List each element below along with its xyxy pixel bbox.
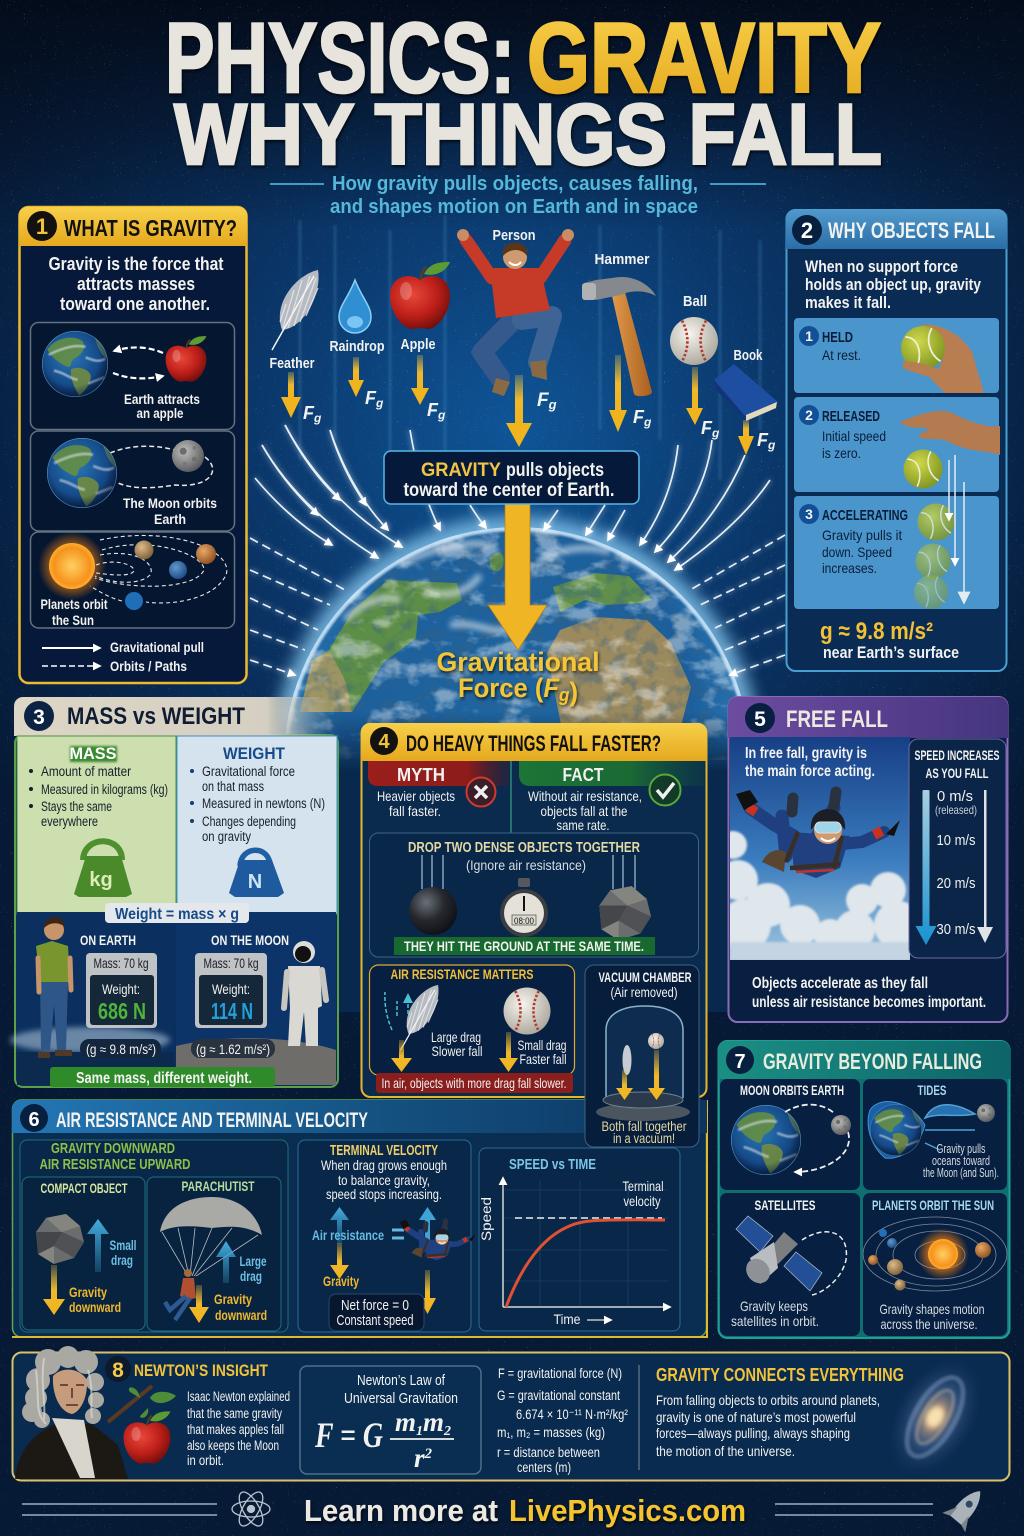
sky scene: [730, 737, 910, 960]
air resistance matters: [370, 965, 574, 1075]
card: tides: [863, 1079, 1007, 1190]
object: jumping person: g: [548, 397, 557, 412]
panel 7: gravity beyond falling: [718, 1041, 1010, 1338]
number badge 2: 2: [801, 218, 813, 243]
footer link text: Learn more at: [304, 1493, 498, 1528]
drop experiment: DROP TWO DENSE OBJECTS TOGETHER: [408, 840, 640, 856]
gravity connects everything: gravity is one of nature’s most powerful: [656, 1409, 856, 1425]
speed vs time chart: velocity: [624, 1193, 660, 1209]
object: raindrop: Raindrop: [330, 338, 384, 355]
definition text: attracts masses: [77, 274, 195, 294]
panel 8: newton's insight: [12, 1342, 1010, 1492]
object: apple: Apple: [400, 336, 436, 353]
same time banner: THEY HIT THE GROUND AT THE SAME TIME.: [404, 938, 644, 954]
step 3: accelerating: down. Speed: [822, 544, 892, 560]
free fall caption: Objects accelerate as they fall: [752, 975, 928, 992]
panel 2: why objects fall: [786, 210, 1007, 671]
definition text: toward one another.: [60, 294, 210, 314]
formula box: 1: [416, 1424, 423, 1439]
g value: g ≈ 9.8 m/s²: [820, 618, 933, 645]
panel 5 heading: FREE FALL: [786, 706, 888, 733]
compact object: [22, 1177, 145, 1330]
terminal velocity subpanel: Net force = 0: [341, 1298, 409, 1314]
intro text: makes it fall.: [805, 294, 891, 312]
drag banner: [376, 1073, 573, 1093]
free fall caption: [752, 975, 986, 1011]
object: apple: [390, 262, 450, 422]
variable definitions: m₁, m₂ = masses (kg): [497, 1425, 605, 1440]
newton portrait: [15, 1346, 128, 1479]
footer link text: [304, 1493, 746, 1528]
card: earth attracts apple: Earth attracts: [124, 391, 200, 407]
weight column: WEIGHT: [223, 744, 286, 763]
newton text: also keeps the Moon: [187, 1438, 279, 1453]
vacuum chamber: VACUUM CHAMBER: [598, 969, 692, 985]
cannonball: [409, 887, 457, 935]
fact: FACT: [562, 765, 604, 785]
object: hammer: Hammer: [594, 251, 650, 268]
on earth scene: 686 N: [98, 998, 146, 1024]
on earth scene: Mass: 70 kg: [94, 955, 148, 971]
panel 6 header: [12, 1100, 707, 1133]
fact: objects fall at the: [540, 803, 628, 819]
vacuum chamber: [585, 965, 699, 1147]
step 1: held: HELD: [822, 329, 853, 346]
object: jumping person: Person: [492, 227, 536, 244]
variable definitions: G = gravitational constant: [497, 1388, 620, 1403]
step 2: released: [794, 397, 1000, 492]
object: feather: [270, 270, 322, 425]
variable definitions: centers (m): [517, 1460, 571, 1475]
weight column: on that mass: [202, 779, 264, 794]
title word: physics: PHYSICS:: [165, 2, 515, 113]
step 3: accelerating: 3: [805, 506, 813, 522]
variable definitions: 6.674 × 10⁻¹¹ N·m²/kg²: [516, 1407, 628, 1422]
number badge 1: 1: [36, 214, 48, 239]
speed vs time chart: Terminal: [622, 1178, 664, 1194]
compact object: Gravity: [69, 1284, 107, 1300]
gravitational force label: Force (F: [458, 673, 560, 703]
object: baseball: F: [701, 418, 712, 438]
panel 8 heading: NEWTON’S INSIGHT: [134, 1361, 268, 1380]
speed scale: [909, 739, 1006, 958]
weight column: on gravity: [202, 829, 251, 844]
myth: fall faster.: [389, 803, 441, 819]
footer link text: LivePhysics.com: [509, 1493, 746, 1528]
gravity connects everything: [656, 1365, 904, 1459]
mass column: [17, 736, 176, 914]
forces subpanel: [20, 1140, 288, 1332]
number badge 8: 8: [112, 1359, 124, 1382]
speed scale: 10 m/s: [936, 833, 976, 849]
formula box: F = G: [314, 1415, 383, 1455]
object: book: [714, 347, 778, 455]
newton text: [187, 1389, 290, 1468]
terminal velocity subpanel: speed stops increasing.: [326, 1186, 442, 1202]
icon: rocket: [942, 1482, 992, 1532]
object: feather: F: [303, 403, 314, 423]
step 1: held: 1: [805, 328, 813, 344]
g value: [820, 618, 959, 662]
free fall text: the main force acting.: [745, 763, 875, 780]
object: apple: F: [427, 400, 438, 420]
object: jumping person: [457, 227, 574, 447]
mass column: Amount of matter: [41, 764, 131, 779]
card: moon orbits earth: [720, 1079, 860, 1190]
card: earth attracts apple: an apple: [136, 405, 184, 421]
object: book: F: [757, 430, 768, 450]
panel 1 heading: WHAT IS GRAVITY?: [64, 215, 237, 241]
air resistance matters: Large drag: [431, 1029, 481, 1045]
parachutist: Large: [240, 1253, 267, 1269]
card: satellites: satellites in orbit.: [731, 1313, 819, 1329]
panel 4 header: [361, 723, 707, 761]
number badge 5: [745, 703, 775, 733]
newton text: that the same gravity: [187, 1406, 282, 1421]
definition text: [48, 254, 224, 314]
card: moon orbits earth: [30, 431, 234, 531]
intro text: holds an object up, gravity: [805, 276, 982, 294]
terminal velocity subpanel: Gravity: [323, 1273, 359, 1289]
callout: gravity pulls objects: [384, 451, 639, 504]
callout: gravity pulls objects: pulls objects: [506, 460, 604, 481]
number badge 4: 4: [378, 731, 390, 753]
object: feather: g: [313, 411, 322, 425]
mass column: Stays the same: [41, 799, 112, 814]
parachutist: drag: [240, 1268, 262, 1284]
on moon scene: (g ≈ 1.62 m/s²): [196, 1042, 270, 1057]
panel 5 header: [728, 697, 1008, 738]
panel 3 header: [14, 697, 330, 736]
gravity connects everything: From falling objects to orbits around planets,: [656, 1392, 880, 1408]
step 3: accelerating: ACCELERATING: [822, 507, 908, 524]
fact: same rate.: [556, 817, 610, 833]
speed scale: (released): [935, 803, 977, 817]
speed scale: 20 m/s: [936, 876, 976, 892]
object: baseball: [670, 293, 720, 440]
footer: [22, 1482, 992, 1532]
mass column: MASS: [70, 744, 116, 763]
step 2: released: is zero.: [822, 445, 861, 461]
central earth globe: [270, 516, 761, 1012]
formula box: 2: [424, 1446, 433, 1462]
card: planets orbit the sun: across the universe.: [880, 1316, 978, 1332]
gravity connects everything: forces—always pulling, always shaping: [656, 1425, 850, 1441]
speed scale: 0 m/s: [937, 789, 973, 805]
card: satellites: [720, 1193, 860, 1336]
object: book: Book: [734, 347, 763, 364]
formula box: m: [423, 1407, 444, 1437]
air resistance matters: Slower fall: [432, 1043, 482, 1059]
on earth scene: (g ≈ 9.8 m/s²): [86, 1042, 156, 1057]
drop experiment: [370, 833, 698, 957]
formula box: r: [414, 1443, 425, 1473]
on moon scene: Mass: 70 kg: [204, 955, 258, 971]
variable definitions: [497, 1366, 628, 1475]
number badge 3: [24, 701, 54, 731]
object: jumping person: F: [537, 390, 549, 411]
callout: gravity pulls objects: GRAVITY: [421, 460, 501, 481]
myth: [368, 761, 510, 819]
speed vs time chart: Time: [554, 1311, 581, 1327]
panel 6 heading: AIR RESISTANCE AND TERMINAL VELOCITY: [56, 1109, 368, 1132]
step 3: accelerating: [794, 455, 999, 609]
number badge 3: 3: [33, 706, 45, 729]
compact object: Small: [110, 1237, 136, 1253]
speed vs time chart: SPEED vs TIME: [509, 1156, 596, 1173]
stopwatch: 08:00: [514, 916, 534, 927]
speed vs time chart: Speed: [479, 1197, 494, 1241]
object: apple: g: [437, 408, 446, 422]
on earth scene: [10, 912, 174, 1085]
object: raindrop: [330, 280, 384, 410]
compact object: downward: [69, 1299, 121, 1315]
panel 7 header: [718, 1041, 1010, 1079]
terminal velocity subpanel: [298, 1140, 475, 1332]
air resistance matters: Faster fall: [520, 1051, 566, 1067]
card: planets orbit sun: [30, 532, 234, 628]
definition text: Gravity is the force that: [48, 254, 224, 274]
object: hammer: F: [633, 407, 644, 427]
intro text: When no support force: [805, 258, 958, 276]
on moon scene: [176, 912, 336, 1085]
card: tides: oceans toward: [932, 1154, 990, 1168]
gravitational force label: Gravitational: [436, 647, 600, 677]
panel 3 heading: MASS vs WEIGHT: [67, 703, 245, 730]
icon: atom: [232, 1489, 270, 1529]
compact object: drag: [111, 1252, 133, 1268]
drop experiment: (Ignore air resistance): [466, 857, 586, 873]
title: [165, 2, 882, 183]
panel 5: free fall: [718, 697, 1008, 1022]
panel 4: do heavy things fall faster: [361, 723, 707, 1147]
mass column: kg: [89, 869, 113, 891]
terminal velocity subpanel: Air resistance: [312, 1227, 384, 1243]
card: earth attracts apple: [30, 322, 234, 430]
card: satellites: SATELLITES: [754, 1197, 816, 1213]
weight column: Measured in newtons (N): [202, 796, 325, 811]
subtitle: and shapes motion on Earth and in space: [330, 196, 698, 218]
forces subpanel: AIR RESISTANCE UPWARD: [40, 1156, 191, 1173]
stopwatch: [500, 878, 548, 937]
formula box: [300, 1366, 481, 1474]
card: satellites: Gravity keeps: [740, 1298, 808, 1314]
free fall text: [745, 745, 875, 780]
parachutist: [147, 1177, 281, 1331]
number badge 7: 7: [734, 1051, 746, 1073]
legend: Gravitational pull: [110, 639, 204, 655]
terminal velocity subpanel: to balance gravity,: [338, 1172, 430, 1188]
card: tides: TIDES: [918, 1082, 946, 1098]
weight column: [177, 736, 337, 914]
vacuum chamber: (Air removed): [610, 984, 678, 1000]
number badge 7: [726, 1046, 754, 1074]
drag banner: In air, objects with more drag fall slower.: [382, 1075, 566, 1091]
step 1: held: [794, 318, 999, 393]
vacuum chamber: Both fall together: [602, 1118, 687, 1134]
parachutist: PARACHUTIST: [182, 1178, 255, 1194]
formula box: Newton’s Law of: [357, 1372, 446, 1389]
rock: [599, 886, 651, 940]
panel 6: air resistance and terminal velocity: [12, 1100, 707, 1337]
subtitle: [270, 173, 766, 218]
card: planets orbit sun: Planets orbit: [40, 596, 108, 612]
card: moon orbits earth: Earth: [154, 511, 186, 527]
parachutist: downward: [215, 1307, 267, 1323]
terminal velocity subpanel: TERMINAL VELOCITY: [330, 1143, 438, 1159]
on moon scene: ON THE MOON: [211, 932, 289, 948]
air resistance matters: Small drag: [518, 1037, 566, 1053]
on moon scene: 114 N: [211, 998, 253, 1024]
newton text: in orbit.: [187, 1453, 224, 1468]
step 3: accelerating: Gravity pulls it: [822, 527, 902, 543]
card: planets orbit the sun: Gravity shapes motion: [880, 1301, 984, 1317]
myth: Heavier objects: [377, 788, 455, 804]
gravity connects everything: the motion of the universe.: [656, 1443, 795, 1459]
gravity field arrows: [250, 425, 785, 675]
legend: Orbits / Paths: [110, 658, 187, 674]
number badge 6: 6: [28, 1109, 40, 1131]
formula box: 2: [443, 1424, 451, 1439]
formula box: m: [395, 1407, 416, 1437]
galaxy: [868, 1342, 1002, 1492]
on moon scene: Weight:: [212, 981, 250, 997]
object: baseball: g: [711, 426, 720, 440]
step 1: held: At rest.: [822, 347, 861, 363]
weight column: Changes depending: [202, 814, 296, 829]
same mass banner: Same mass, different weight.: [76, 1070, 252, 1087]
object: hammer: g: [643, 415, 652, 429]
gravitational force label: ): [569, 677, 578, 707]
number badge 2: [792, 215, 822, 245]
gravitational force label: g: [558, 685, 569, 705]
card: tides: Gravity pulls: [936, 1142, 986, 1156]
intro text: [805, 258, 982, 312]
card: planets orbit the sun: [863, 1193, 1007, 1336]
formula box: Universal Gravitation: [344, 1390, 458, 1407]
air resistance matters: AIR RESISTANCE MATTERS: [390, 966, 534, 982]
panel 1: what is gravity: [19, 207, 247, 683]
forces subpanel: GRAVITY DOWNWARD: [51, 1140, 175, 1157]
step 3: accelerating: increases.: [822, 560, 877, 576]
mass column: everywhere: [41, 814, 98, 829]
object: feather: Feather: [270, 355, 315, 372]
compact object: COMPACT OBJECT: [40, 1180, 128, 1196]
terminal velocity subpanel: Constant speed: [336, 1313, 414, 1329]
panel 2 header: [786, 210, 1007, 249]
newton text: Isaac Newton explained: [187, 1389, 290, 1404]
weight column: N: [248, 871, 262, 893]
number badge 6: [20, 1104, 48, 1132]
object: baseball: Ball: [683, 293, 707, 310]
title line 2: WHY THINGS FALL: [174, 87, 882, 183]
step 2: released: RELEASED: [822, 408, 880, 425]
terminal velocity subpanel: When drag grows enough: [321, 1157, 447, 1173]
myth: MYTH: [397, 765, 445, 785]
object: raindrop: F: [365, 388, 376, 408]
on earth scene: Weight:: [102, 981, 140, 997]
fact: Without air resistance,: [528, 788, 642, 804]
formula pill: Weight = mass × g: [115, 906, 239, 923]
number badge 1: [27, 211, 57, 241]
vacuum chamber: in a vacuum!: [613, 1130, 675, 1146]
central gravity arrow: [488, 504, 547, 650]
parachutist: Gravity: [214, 1291, 252, 1307]
panel 3: mass vs weight: [10, 697, 338, 1087]
speed vs time chart: [479, 1148, 680, 1331]
number badge 8: [105, 1356, 131, 1382]
gravitational force label: [436, 647, 600, 707]
variable definitions: F = gravitational force (N): [498, 1366, 622, 1381]
subtitle: How gravity pulls objects, causes falling,: [332, 173, 698, 195]
free fall text: In free fall, gravity is: [745, 745, 867, 762]
panel 1 header: [19, 207, 247, 246]
variable definitions: r = distance between: [497, 1445, 600, 1460]
on earth scene: ON EARTH: [80, 932, 136, 948]
number badge 5: 5: [754, 708, 766, 731]
card: moon orbits earth: MOON ORBITS EARTH: [740, 1082, 844, 1098]
object: book: g: [767, 438, 776, 452]
card: moon orbits earth: The Moon orbits: [123, 495, 217, 511]
callout: gravity pulls objects: toward the center of Earth.: [404, 480, 614, 501]
speed scale: AS YOU FALL: [926, 765, 989, 781]
number badge 4: [370, 727, 398, 755]
apple branch: [108, 1386, 176, 1464]
newton text: that makes apples fall: [187, 1422, 284, 1437]
step 2: released: 2: [805, 407, 813, 423]
step 2: released: Initial speed: [822, 428, 886, 444]
panel 4 heading: DO HEAVY THINGS FALL FASTER?: [406, 731, 661, 756]
object: raindrop: g: [375, 396, 384, 410]
fact: [519, 761, 705, 833]
speed scale: 30 m/s: [936, 922, 976, 938]
weight column: Gravitational force: [202, 764, 295, 779]
title word: gravity: GRAVITY: [527, 2, 881, 113]
mass column: Measured in kilograms (kg): [41, 782, 168, 797]
object: hammer: [582, 251, 656, 432]
legend: [42, 639, 204, 674]
gravity connects everything: GRAVITY CONNECTS EVERYTHING: [656, 1365, 904, 1385]
g value: near Earth’s surface: [823, 644, 959, 662]
card: planets orbit sun: the Sun: [52, 612, 94, 628]
